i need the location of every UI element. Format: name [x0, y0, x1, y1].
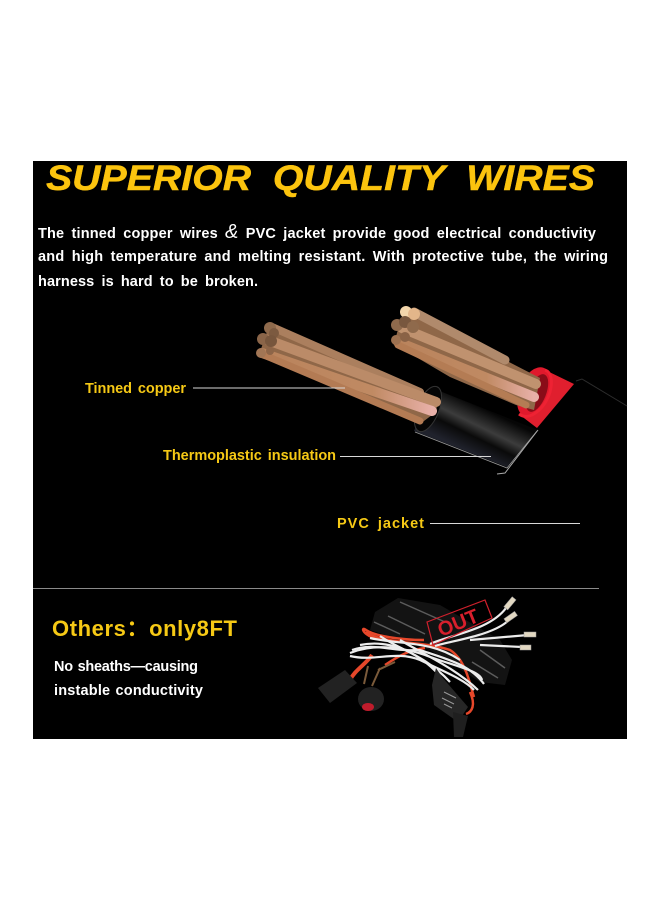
- callout: tinned copper: Tinned copper: [85, 381, 186, 397]
- red wires: [350, 629, 474, 714]
- black background panel: [33, 161, 627, 739]
- title: SUPERIOR QUALITY WIRES: [46, 159, 595, 198]
- heading: others: Others：only8FT: [52, 616, 238, 641]
- relay: [432, 668, 468, 722]
- comparison text: [54, 659, 203, 699]
- out stamp: OUT: [435, 605, 482, 642]
- comparison text: instable conductivity: [54, 683, 203, 699]
- highlights on looms: [374, 602, 505, 678]
- red insulation: [520, 368, 574, 428]
- icon: wiring harness: [318, 597, 536, 737]
- intro text: [38, 221, 608, 290]
- white wires: [350, 608, 528, 690]
- strands: [398, 312, 536, 405]
- out stamp: [427, 600, 492, 645]
- black insulation: [414, 388, 538, 467]
- strands: [262, 327, 436, 421]
- strand ends: [264, 322, 276, 334]
- thin trailing wire: [576, 379, 627, 406]
- terminals: [504, 597, 536, 650]
- icon: right wire with red insulation: [391, 306, 574, 428]
- intro text: harness is hard to be broken.: [38, 274, 258, 290]
- callout: thermoplastic insulation: Thermoplastic insulation: [163, 448, 336, 464]
- comparison text: No sheaths—causing: [54, 659, 198, 675]
- callout: PVC jacket: PVC jacket: [337, 516, 424, 532]
- intro text: The tinned copper wires & PVC jacket provide good electrical conductivity: [38, 221, 596, 243]
- strand base: [394, 312, 540, 410]
- connector: [318, 670, 357, 703]
- black looms: [370, 598, 512, 685]
- icon: left wire with black insulation: [256, 322, 538, 474]
- red ring lip: [519, 370, 551, 416]
- intro text: and high temperature and melting resistant. With protective tube, the wiring: [38, 249, 608, 265]
- strand ends: [400, 306, 412, 318]
- relay label: [442, 692, 456, 708]
- strand base: [260, 326, 438, 424]
- divider: [33, 588, 599, 590]
- rocker switch: [358, 687, 384, 711]
